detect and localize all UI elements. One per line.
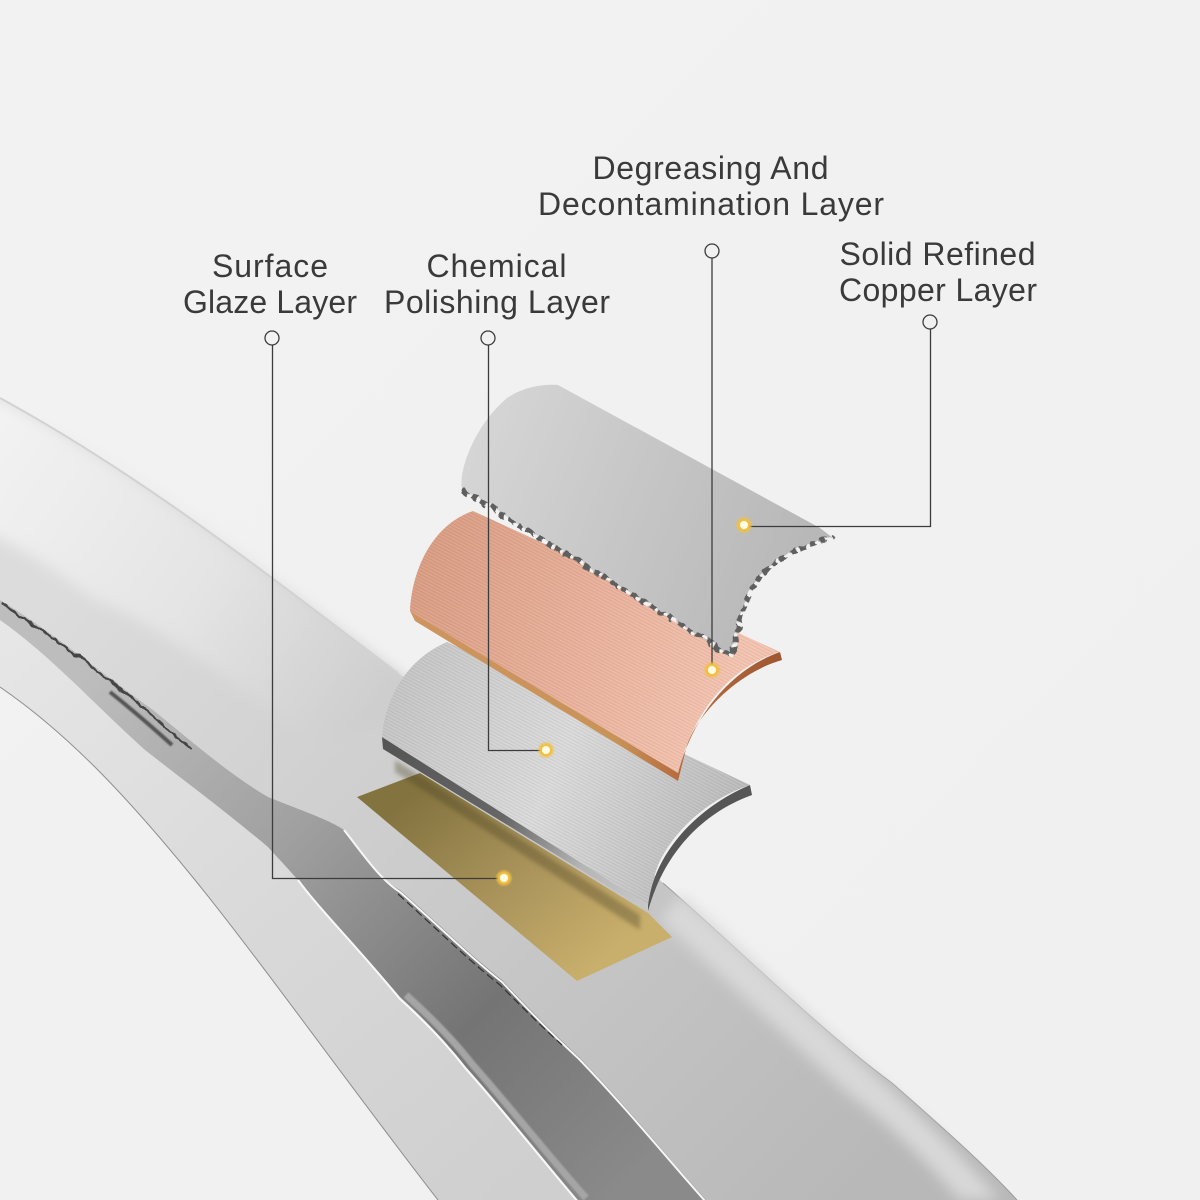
layer: gold surface glaze: [357, 773, 672, 981]
layer: solid refined copper top sheet: [461, 385, 833, 656]
label: Surface Glaze Layer: Surface: [212, 248, 328, 284]
label: Chemical Polishing Layer: Chemical: [426, 248, 566, 284]
label: Degreasing And Decontamination Layer: Degreasing And: [592, 150, 828, 186]
marker: silver layer: [537, 741, 555, 759]
leader: Chemical Polishing Layer: [481, 331, 542, 750]
label: Surface Glaze Layer: Glaze Layer: [183, 284, 357, 320]
marker: gold layer: [495, 869, 513, 887]
marker: top sheet layer: [735, 516, 753, 534]
leader: Degreasing And Decontamination Layer: [705, 244, 719, 666]
marker: copper layer: [703, 661, 721, 679]
label: Surface Glaze Layer: [183, 248, 357, 320]
label: Solid Refined Copper Layer: Copper Layer: [839, 272, 1037, 308]
layer: silver chemical polishing: [382, 642, 752, 930]
label: Solid Refined Copper Layer: [839, 236, 1037, 308]
pan rim: [0, 380, 1017, 1200]
label: Chemical Polishing Layer: [384, 248, 610, 320]
leader: Surface Glaze Layer: [265, 331, 500, 878]
dark groove in rim: [0, 600, 706, 1200]
lower pan strip: [0, 620, 578, 1200]
leader: Solid Refined Copper Layer: [748, 315, 937, 526]
layer: copper degreasing: [410, 511, 782, 781]
label: Degreasing And Decontamination Layer: Decontamination Layer: [538, 186, 884, 222]
label: Degreasing And Decontamination Layer: [538, 150, 884, 222]
label: Chemical Polishing Layer: Polishing Layer: [384, 284, 610, 320]
label: Solid Refined Copper Layer: Solid Refined: [840, 236, 1036, 272]
